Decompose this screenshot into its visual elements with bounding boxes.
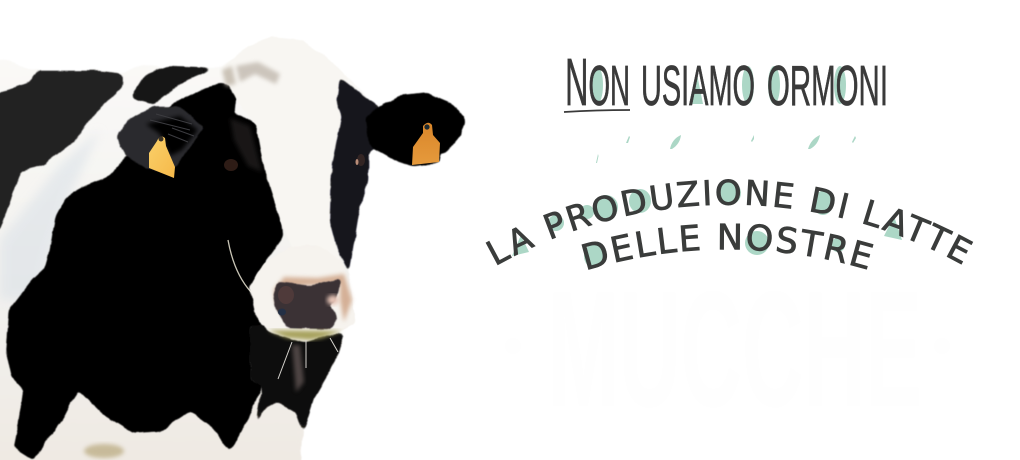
arc line two: DELLE NOSTRE [582,223,874,270]
left eye [224,159,238,171]
pale blue shadow on shoulder stripe [0,130,100,300]
collar strand [228,240,251,292]
headline word: non: NON [565,45,630,120]
arc line one: LA PRODUZIONE DI LATTE [486,179,974,266]
mint letter fills [512,181,902,268]
mint letter fills [591,66,846,104]
muzzle white [250,246,356,342]
headline word: ormoni: ORMONI [767,54,888,118]
curved heading: la produzione di latte delle nostre [486,179,974,270]
mint flecks of the white script line [596,135,856,163]
nostril pink [327,295,339,305]
cow body silhouette [0,37,377,460]
horn stub [222,66,236,86]
small back black patch [131,66,214,105]
whiskers [278,338,338,379]
right eye [357,154,365,166]
headline word: usiamo: USIAMO [641,54,755,118]
ear fur lines [150,114,194,142]
dark grey fur around eye [230,118,262,172]
side dots [505,338,521,354]
nose drip [278,308,286,316]
forehead brown shading [236,62,280,84]
left ear tag [149,137,175,178]
underline [564,110,630,112]
upper shoulder black patch [0,71,123,237]
right ear tag [412,123,440,165]
muzzle tan surround [274,274,352,322]
white blaze [222,37,350,290]
lower jaw [250,325,344,432]
right face black [330,78,378,272]
nostril [278,286,294,304]
right ear [366,93,466,166]
cow photo illustration [0,37,466,460]
nose [273,279,340,329]
lower lip [268,330,342,340]
chest tan mark [84,444,124,458]
headline: non usiamo ormoni [564,45,888,120]
left ear [117,107,204,178]
white on white word: mucche [505,257,950,441]
main neck black region [6,84,283,460]
jaw highlight [292,345,304,392]
